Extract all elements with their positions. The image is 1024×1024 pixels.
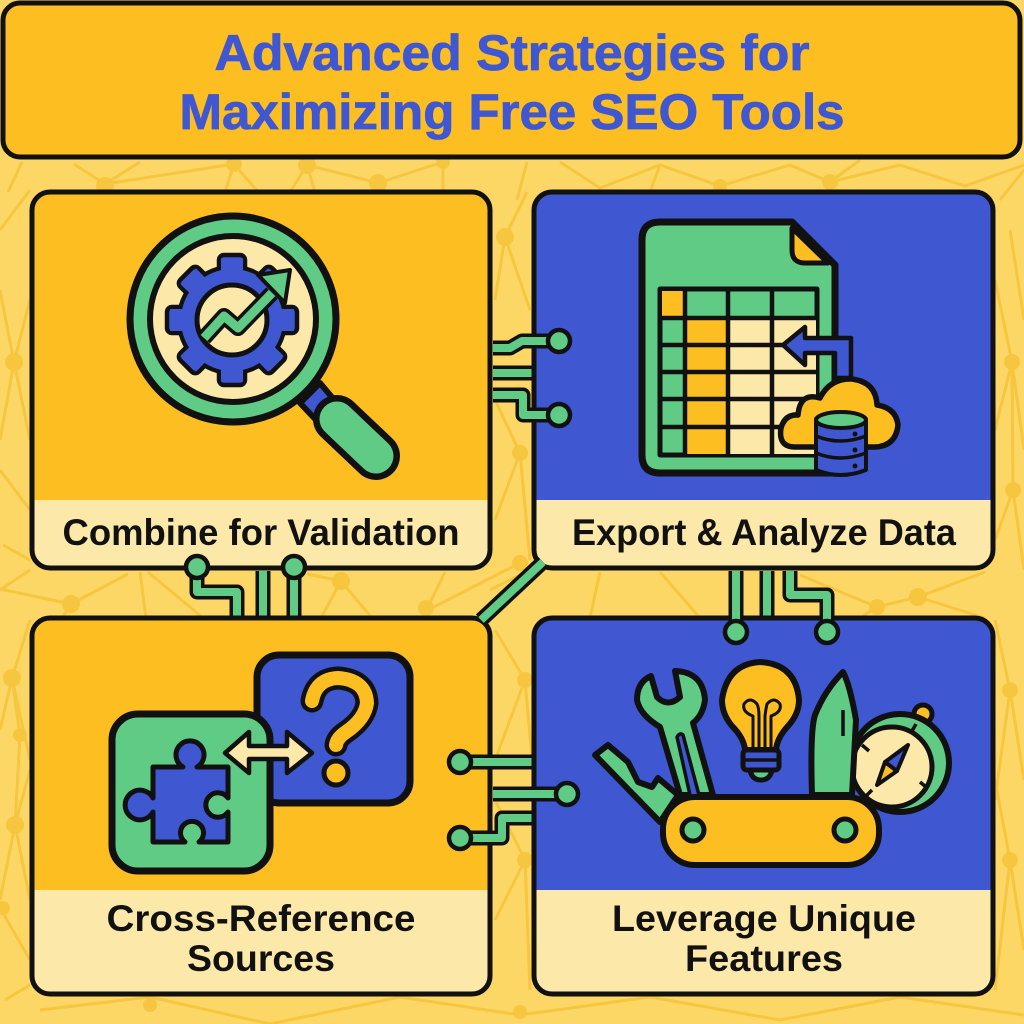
label: Leverage Unique [612, 898, 916, 939]
connectors: top-left to top-right [493, 330, 570, 426]
label [612, 898, 916, 979]
connectors: top-left to bottom-left [186, 556, 305, 616]
panel: leverage unique features [534, 618, 993, 994]
panel: export and analyze data [534, 192, 993, 568]
title banner [3, 3, 1020, 157]
title [180, 25, 845, 140]
connectors: bottom-left to bottom-right [449, 751, 578, 849]
icon: magnifying glass with gear [130, 216, 376, 456]
panel: cross-reference sources [32, 618, 490, 994]
panel: combine for validation [32, 192, 490, 568]
label: Export & Analyze Data [572, 512, 956, 553]
label: Sources [187, 938, 335, 979]
label: Features [685, 938, 843, 979]
icon: spreadsheet with cloud database [642, 222, 898, 475]
label [106, 898, 416, 979]
label: Cross-Reference [106, 898, 416, 939]
icon: multitool [595, 662, 949, 865]
title: Advanced Strategies for [214, 25, 810, 81]
icon: puzzle and question mark [112, 655, 410, 871]
label: Combine for Validation [62, 512, 460, 553]
title: Maximizing Free SEO Tools [180, 84, 845, 140]
connector: diagonal [481, 562, 543, 620]
connectors: top-right to bottom-right [725, 571, 838, 643]
